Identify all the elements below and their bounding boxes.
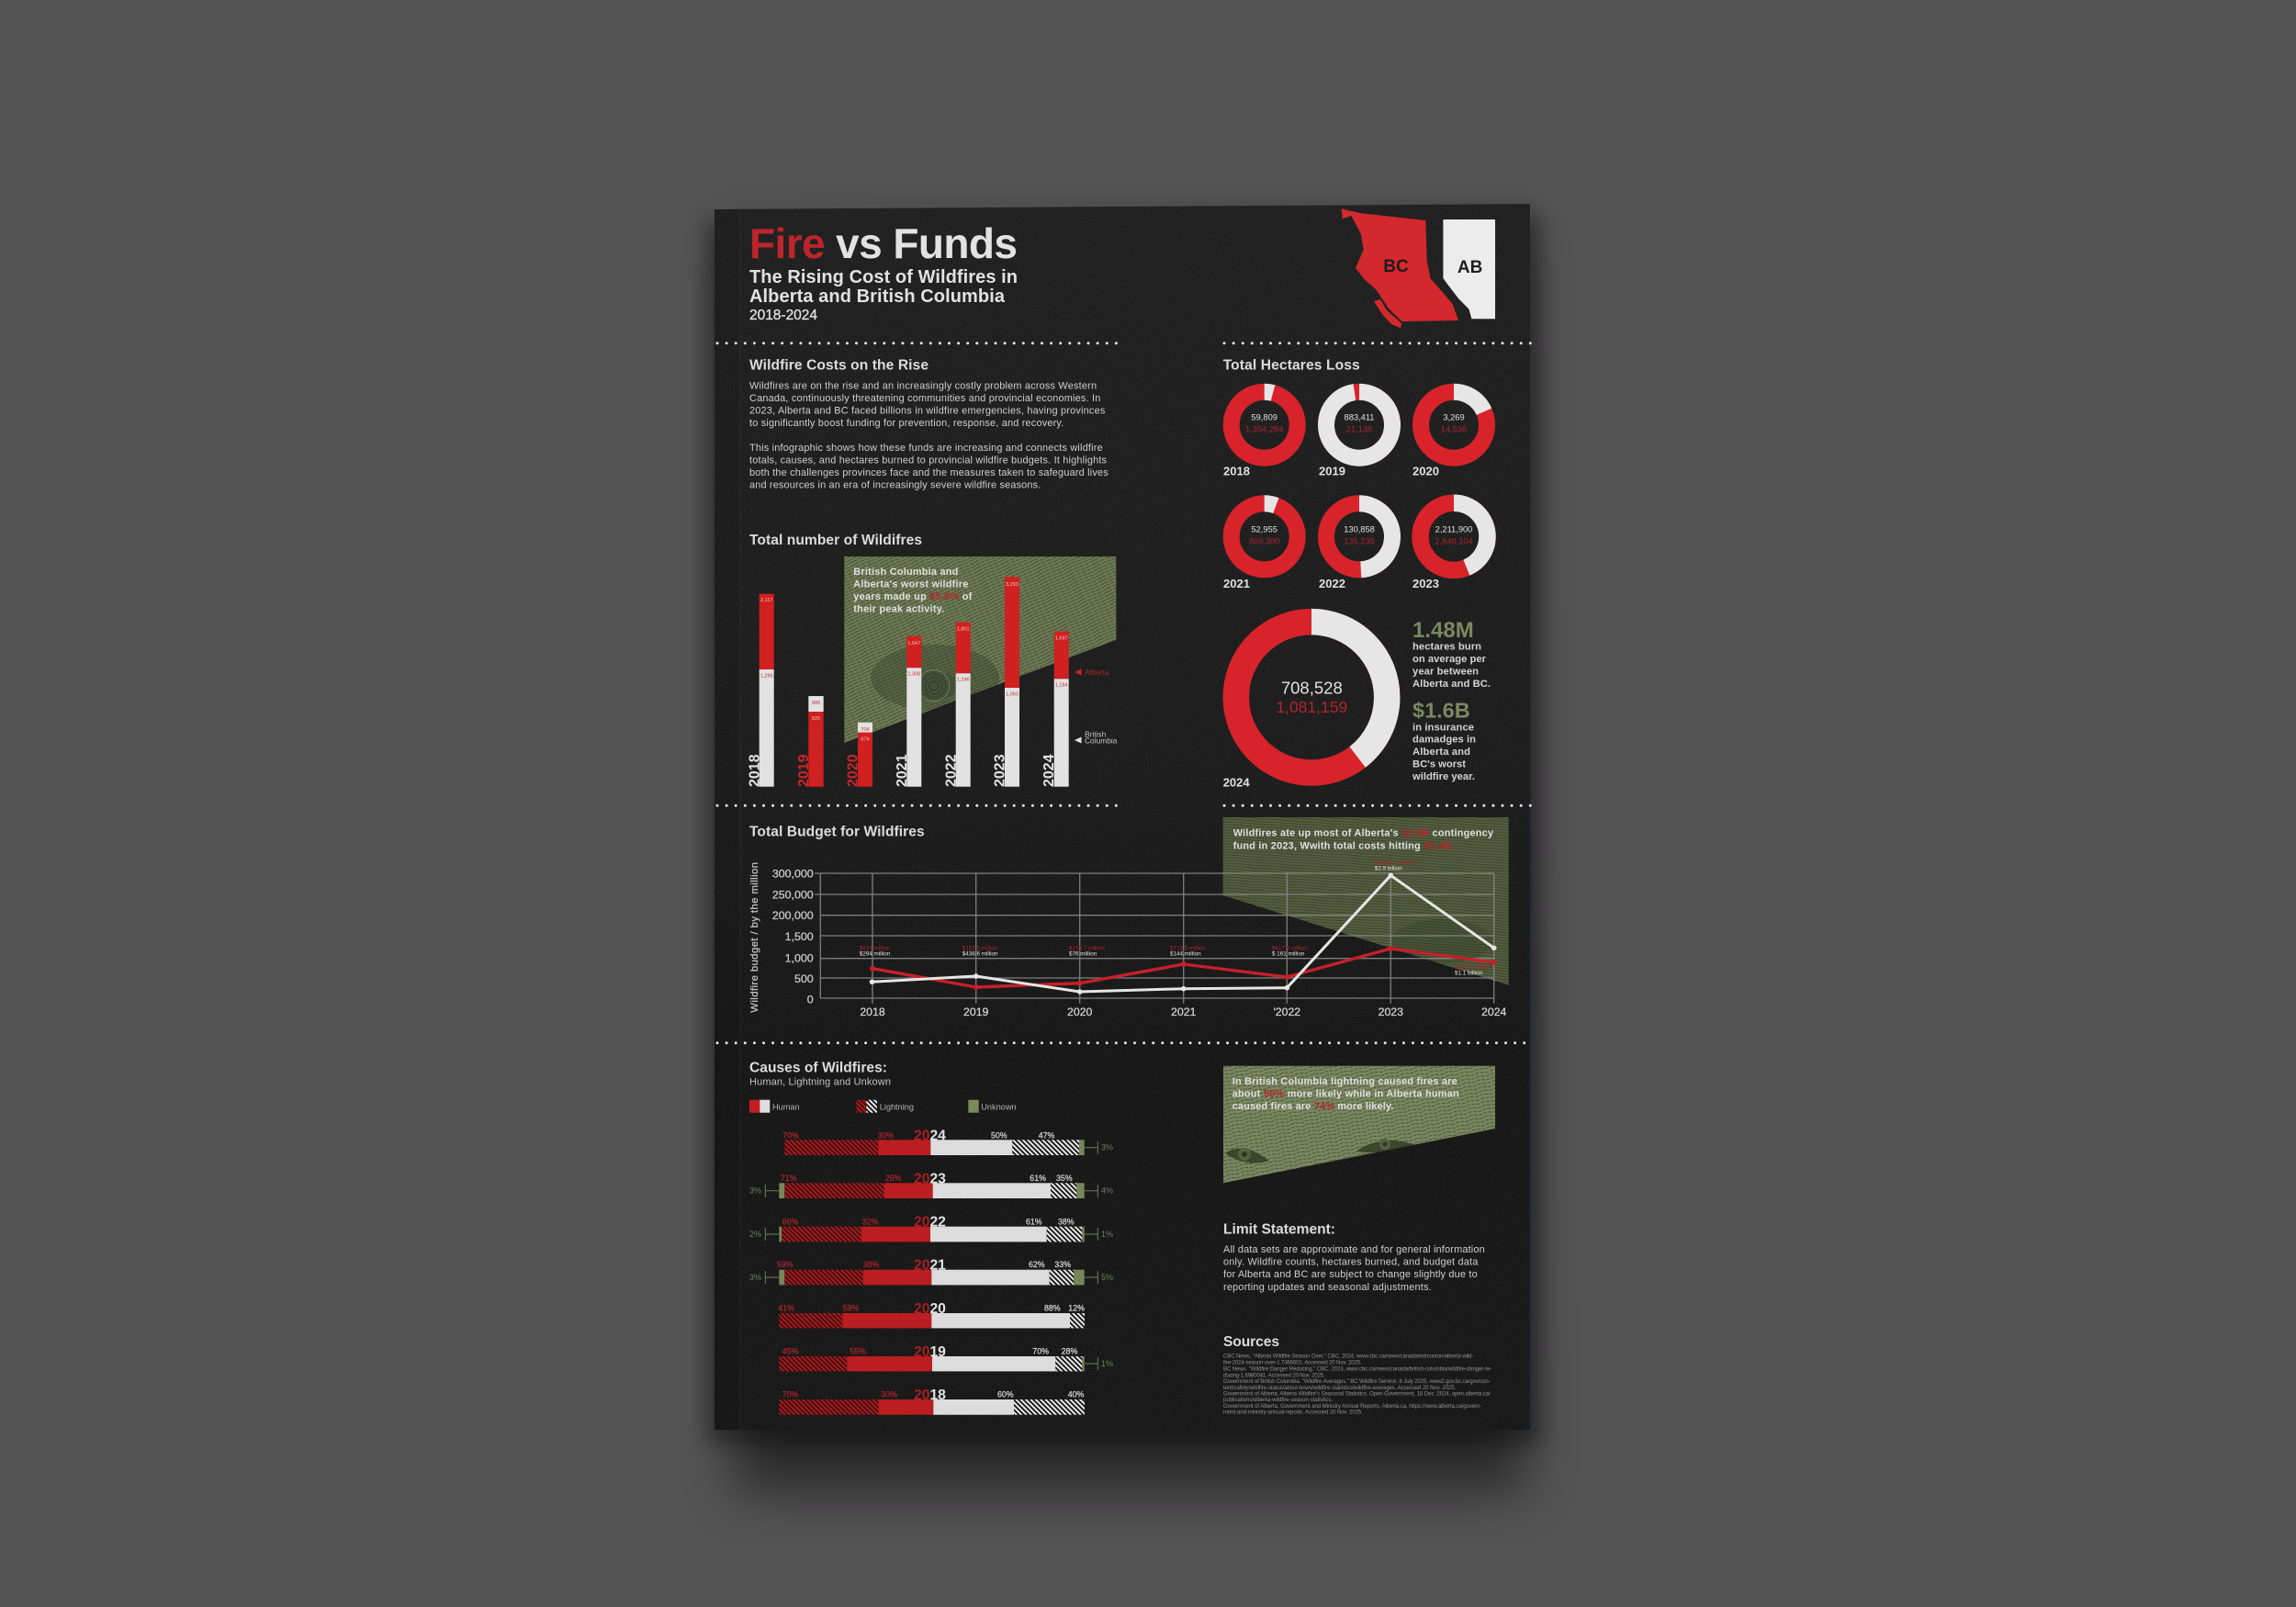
row 2018: 60% bbox=[997, 1389, 1014, 1399]
heading: total number of wildfires: Total number of Wildifres bbox=[749, 533, 922, 548]
row 2022: 1% bbox=[1101, 1230, 1113, 1239]
text block: wildfire costs on the rise: both the challenges provinces face and the measures taken to safeguard lives bbox=[749, 467, 1109, 478]
donut 2023: 2,840,104 bbox=[1435, 537, 1473, 546]
donut 2022 bbox=[1319, 503, 1392, 590]
bar 2023: 3,293 bbox=[1006, 582, 1019, 588]
y axis title: Wildfire budget / by the million bbox=[749, 862, 760, 1013]
green banknote panel: worst wildfire years: British Columbia and bbox=[853, 567, 958, 578]
donut 2019: 21,138 bbox=[1346, 425, 1372, 434]
row 2019 bbox=[779, 1344, 1113, 1371]
bar 2024: 1,184 bbox=[1055, 682, 1068, 688]
donut 2020 bbox=[1412, 392, 1487, 478]
donut 2022: 130,858 bbox=[1344, 524, 1375, 534]
sources: publications/alberta-wildfire-season-statistics. bbox=[1223, 1397, 1333, 1403]
poster sheet bbox=[715, 204, 1531, 1430]
row 2021: 33% bbox=[1054, 1260, 1071, 1269]
text block: wildfire costs on the rise: to significantly boost funding for prevention, response, and recovery. bbox=[749, 418, 1064, 429]
bar 2021: 2021 bbox=[895, 754, 910, 787]
sources: fire-2024-season-over-1.7366601. Accessed 20 Nov. 2025. bbox=[1223, 1360, 1362, 1366]
x axis labels: 2021 bbox=[1171, 1006, 1197, 1018]
white series: British Columbia bbox=[870, 872, 1496, 995]
data labels: $417.9 million bbox=[1272, 945, 1308, 951]
stat: insurance damages: damadges in bbox=[1412, 735, 1476, 746]
donut 2018: 59,809 bbox=[1251, 413, 1277, 422]
donut 2024 bbox=[1223, 622, 1387, 790]
data labels: $182.5 million bbox=[962, 945, 998, 951]
bar 2020 bbox=[845, 723, 872, 787]
row 2018 bbox=[779, 1388, 1085, 1415]
sources: Government of British Columbia. "Wildfire Averages." BC Wildfire Service, 8 July 2025, www2.gov.bc.ca/gov/con- bbox=[1223, 1378, 1491, 1385]
heading: total budget: Total Budget for Wildfires bbox=[749, 825, 925, 840]
row 2019: 70% bbox=[1032, 1346, 1049, 1355]
row 2020: 2020 bbox=[914, 1301, 946, 1317]
data labels: $1.1 billion bbox=[1455, 971, 1483, 977]
x axis labels: 2023 bbox=[1379, 1006, 1403, 1018]
data labels bbox=[860, 860, 1491, 977]
legend: British Columbia: Columbia bbox=[1085, 736, 1118, 746]
donut 2021: 869,300 bbox=[1249, 537, 1280, 546]
donut 2024: 708,528 bbox=[1281, 678, 1343, 697]
bar 2024: 2024 bbox=[1041, 754, 1057, 787]
stat: hectares burned: hectares burn bbox=[1412, 641, 1481, 652]
limit statement: only. Wildfire counts, hectares burned, and budget data bbox=[1223, 1257, 1479, 1268]
row 2018: 40% bbox=[1068, 1389, 1084, 1399]
data labels: $1,082.5 million bbox=[1375, 860, 1415, 866]
donut 2018: 1,354,284 bbox=[1245, 425, 1283, 434]
bar 2019: 989 bbox=[812, 701, 820, 706]
x axis labels bbox=[860, 1006, 1507, 1018]
row 2020: 88% bbox=[1044, 1304, 1061, 1313]
data labels: $ 161 million bbox=[1272, 951, 1305, 958]
subtitle bbox=[749, 267, 1018, 323]
sources: Government of Alberta. Government and Ministry Annual Reports. Alberta.ca, https://www.alberta.ca/govern- bbox=[1223, 1403, 1481, 1410]
row 2022: 66% bbox=[782, 1217, 798, 1226]
bar 2020: 704 bbox=[861, 727, 870, 733]
row 2018: 30% bbox=[881, 1389, 897, 1399]
data labels: $438.6 million bbox=[962, 951, 998, 958]
green banknote panel: lightning vs human bbox=[1223, 1065, 1496, 1185]
green banknote panel: lightning vs human: In British Columbia lightning caused fires are bbox=[1232, 1076, 1458, 1087]
data labels: $294 million bbox=[860, 951, 891, 958]
row 2021: 2021 bbox=[914, 1258, 946, 1274]
sources: Sources bbox=[1223, 1334, 1279, 1350]
donut 2019: 883,411 bbox=[1345, 413, 1374, 422]
sources: Government of Alberta. Alberta Wildfire's Seasonal Statistics. Open Government, 18 Dec. 2024, open.alberta.ca/ bbox=[1223, 1390, 1491, 1397]
row 2023: 2023 bbox=[914, 1171, 946, 1186]
row 2019: 1% bbox=[1101, 1359, 1113, 1368]
limit statement: for Alberta and BC are subject to change slightly due to bbox=[1223, 1269, 1478, 1280]
bar 2024 bbox=[1041, 632, 1069, 787]
donut 2019: 2019 bbox=[1319, 465, 1345, 478]
text block: wildfire costs on the rise: totals, causes, and hectares burned to provincial wildfire budgets. It highlights bbox=[749, 455, 1108, 466]
map: BC and Alberta: BC bbox=[1383, 257, 1409, 276]
row 2024: 2024 bbox=[914, 1129, 946, 1144]
bar 2019 bbox=[796, 696, 824, 787]
row 2022: 38% bbox=[1058, 1217, 1075, 1226]
row 2023: 4% bbox=[1101, 1186, 1113, 1196]
legend: Alberta: Alberta bbox=[1085, 668, 1109, 677]
green banknote panel: worst wildfire years bbox=[844, 556, 1117, 744]
bar 2019: 2019 bbox=[796, 754, 812, 787]
row 2022: 61% bbox=[1026, 1217, 1042, 1226]
row 2023: 61% bbox=[1030, 1174, 1046, 1183]
row 2021: 59% bbox=[777, 1260, 793, 1269]
row 2020: 41% bbox=[778, 1304, 794, 1313]
row 2020: 59% bbox=[843, 1304, 859, 1313]
green banknote panel: lightning vs human: caused fires are 74% more likely. bbox=[1232, 1101, 1393, 1112]
row 2021: 62% bbox=[1029, 1260, 1045, 1269]
row 2023 bbox=[749, 1171, 1113, 1198]
row 2024: 47% bbox=[1039, 1130, 1054, 1140]
bar 2018: 2,117 bbox=[760, 598, 772, 603]
green banknote panel: worst wildfire years: years made up 85.8% of bbox=[853, 591, 973, 602]
data labels: $76 million bbox=[1069, 951, 1097, 958]
line chart: wildfire budgets bbox=[749, 860, 1507, 1018]
sources: ment-and-ministry-annual-reports. Accessed 20 Nov. 2025. bbox=[1223, 1409, 1363, 1415]
bar 2020: 679 bbox=[861, 736, 870, 742]
row 2021: 5% bbox=[1101, 1273, 1113, 1282]
text block: wildfire costs on the rise: Canada, continuously threatening communities and provincial economies. In bbox=[749, 393, 1100, 404]
data labels: $2.9 billion bbox=[1375, 866, 1402, 872]
donut 2022: 135,235 bbox=[1344, 537, 1375, 546]
stat: hectares burned: year between bbox=[1412, 666, 1479, 677]
red series: Alberta bbox=[870, 946, 1497, 990]
y axis labels: 300,000 bbox=[772, 867, 814, 880]
y axis labels: 1,000 bbox=[785, 951, 814, 964]
data labels: $718.5 million bbox=[1170, 945, 1206, 951]
green banknote panel: contingency fund bbox=[1222, 817, 1509, 986]
row 2020 bbox=[778, 1301, 1085, 1328]
bar 2021: 1,647 bbox=[907, 641, 920, 646]
row 2022: 32% bbox=[862, 1217, 878, 1226]
y axis labels: 500 bbox=[794, 972, 814, 985]
x axis labels: '2022 bbox=[1273, 1006, 1300, 1018]
donut 2023 bbox=[1412, 503, 1488, 590]
donut 2020: 14,536 bbox=[1441, 425, 1467, 434]
bar 2020: 2020 bbox=[845, 754, 861, 787]
stat: insurance damages: wildfire year. bbox=[1412, 771, 1475, 782]
x axis labels: 2018 bbox=[860, 1006, 885, 1018]
green banknote panel: contingency fund: fund in 2023, Wwith total costs hitting $3.4B. bbox=[1233, 840, 1454, 851]
y axis labels: 0 bbox=[807, 994, 814, 1006]
causes legend: Lightning bbox=[880, 1102, 914, 1111]
bar 2022: 1,801 bbox=[957, 627, 970, 633]
stat: hectares burned bbox=[1412, 618, 1491, 690]
bar 2022 bbox=[944, 623, 971, 787]
donut 2020: 2020 bbox=[1412, 465, 1439, 478]
stat: hectares burned: on average per bbox=[1412, 654, 1487, 665]
data labels: $615 million bbox=[860, 945, 891, 951]
donut 2019 bbox=[1319, 392, 1392, 478]
row 2022: 2022 bbox=[914, 1215, 946, 1231]
causes legend: Human bbox=[772, 1102, 800, 1111]
x axis labels: 2020 bbox=[1067, 1006, 1093, 1018]
row 2021: 38% bbox=[863, 1260, 879, 1269]
row 2024: 50% bbox=[991, 1130, 1007, 1140]
row 2024: 3% bbox=[1101, 1143, 1113, 1152]
icon: banknote eye left bbox=[1225, 1148, 1269, 1163]
x axis labels: 2024 bbox=[1481, 1006, 1507, 1018]
donut 2021 bbox=[1223, 503, 1298, 590]
limit statement: Limit Statement: bbox=[1223, 1221, 1335, 1237]
causes legend bbox=[749, 1100, 1017, 1113]
map: BC and Alberta bbox=[1342, 208, 1495, 328]
data labels: $144 million bbox=[1170, 951, 1201, 958]
sources: tent/safety/wildfire-status/about-bcws/wildfire-statistics/wildfire-averages. Accessed 20 Nov. 2025. bbox=[1223, 1385, 1457, 1391]
green banknote panel: lightning vs human: about 50% more likely while in Alberta human bbox=[1232, 1089, 1459, 1100]
title: Fire vs Funds bbox=[749, 219, 1018, 267]
row 2020: 12% bbox=[1068, 1304, 1085, 1313]
y axis labels: 200,000 bbox=[772, 909, 814, 922]
row 2021 bbox=[749, 1258, 1113, 1285]
bar 2022: 1,246 bbox=[957, 678, 970, 683]
row 2023: 26% bbox=[885, 1174, 901, 1183]
bar 2019: 825 bbox=[812, 716, 820, 722]
donut 2020: 3,269 bbox=[1443, 413, 1465, 422]
sources: BC News. "Wildfire Danger Reducing." CBC, 2023, www.cbc.ca/news/canada/british-columbia/wildfire-danger-re- bbox=[1223, 1365, 1491, 1372]
limit statement: reporting updates and seasonal adjustments. bbox=[1223, 1282, 1432, 1293]
row 2018: 2018 bbox=[914, 1388, 946, 1403]
map: BC and Alberta: AB bbox=[1458, 258, 1482, 277]
heading: causes of wildfires: Human, Lightning and Unkown bbox=[749, 1076, 891, 1087]
donut 2021: 2021 bbox=[1223, 577, 1250, 590]
bar 2023 bbox=[992, 577, 1019, 787]
legend: British Columbia bbox=[1075, 729, 1118, 746]
causes chart bbox=[749, 1129, 1113, 1415]
row 2022 bbox=[749, 1215, 1113, 1242]
row 2023: 71% bbox=[781, 1174, 797, 1183]
donut 2024: 2024 bbox=[1223, 776, 1250, 790]
row 2022: 2% bbox=[749, 1230, 761, 1239]
row 2024: 30% bbox=[878, 1130, 894, 1140]
row 2024 bbox=[782, 1129, 1113, 1155]
sources bbox=[1223, 1334, 1491, 1415]
data labels: $780.1 million bbox=[1455, 964, 1491, 971]
row 2019: 28% bbox=[1062, 1346, 1077, 1355]
donut 2021: 52,955 bbox=[1251, 524, 1277, 534]
row 2021: 3% bbox=[749, 1273, 761, 1282]
donut 2024: 1,081,159 bbox=[1276, 698, 1347, 716]
row 2019: 45% bbox=[782, 1346, 798, 1355]
row 2018: 70% bbox=[782, 1389, 798, 1399]
poster drop shadow bbox=[707, 213, 1541, 1492]
text block: wildfire costs on the rise: This infographic shows how these funds are increasing and connects wildfire bbox=[749, 443, 1103, 454]
green banknote panel: contingency fund: Wildfires ate up most of Alberta's $1.5B contingency bbox=[1233, 828, 1493, 839]
donut 2023: 2,211,900 bbox=[1435, 524, 1472, 534]
donut 2018: 2018 bbox=[1223, 465, 1250, 478]
bar 2023: 1,065 bbox=[1006, 691, 1019, 697]
subtitle: The Rising Cost of Wildfires in bbox=[749, 267, 1018, 287]
y axis labels: 1,500 bbox=[785, 930, 814, 943]
row 2023: 35% bbox=[1056, 1174, 1073, 1183]
green banknote panel: worst wildfire years: their peak activity. bbox=[853, 604, 944, 615]
heading: causes of wildfires: Causes of Wildfires: bbox=[749, 1060, 887, 1075]
stat: insurance damages: in insurance bbox=[1412, 722, 1474, 733]
donut 2018 bbox=[1223, 392, 1298, 478]
legend: British Columbia: British bbox=[1085, 729, 1107, 738]
donut 2022: 2022 bbox=[1319, 577, 1345, 590]
stat: insurance damages: BC's worst bbox=[1412, 759, 1466, 770]
text block: wildfire costs on the rise: and resources in an era of increasingly severe wildfire seasons. bbox=[749, 479, 1041, 490]
stat: insurance damages: $1.6B bbox=[1412, 699, 1470, 723]
limit statement bbox=[1223, 1221, 1485, 1293]
stacked bar chart: number of wildfires bbox=[748, 577, 1118, 787]
row 2019: 2019 bbox=[914, 1344, 946, 1360]
text block: wildfire costs on the rise: 2023, Alberta and BC faced billions in wildfire emergencies, having provinces bbox=[749, 406, 1106, 417]
donut 2023: 2023 bbox=[1412, 577, 1439, 590]
x axis labels: 2019 bbox=[963, 1006, 989, 1018]
bar 2018: 2018 bbox=[748, 754, 762, 787]
bar 2023: 2023 bbox=[992, 754, 1008, 787]
bar 2018: 1,286 bbox=[760, 674, 773, 680]
subtitle: Alberta and British Columbia bbox=[749, 287, 1006, 307]
icon: banknote eye right bbox=[1356, 1139, 1416, 1152]
heading: causes of wildfires bbox=[749, 1060, 891, 1087]
stat: hectares burned: 1.48M bbox=[1412, 618, 1474, 643]
y axis labels bbox=[772, 867, 814, 1006]
causes legend: Unknown bbox=[981, 1102, 1017, 1111]
row 2023: 3% bbox=[749, 1186, 761, 1196]
heading: total hectares loss: Total Hectares Loss bbox=[1223, 358, 1360, 374]
sources: CBC News. "Alberta Wildfire Season Over." CBC, 2024, www.cbc.ca/news/canada/edmonton/alberta-wild- bbox=[1223, 1354, 1473, 1360]
stat: insurance damages: Alberta and bbox=[1412, 747, 1470, 758]
y axis labels: 250,000 bbox=[772, 889, 814, 902]
bar 2022: 2022 bbox=[944, 754, 959, 787]
limit statement: All data sets are approximate and for general information bbox=[1223, 1244, 1485, 1255]
row 2024: 70% bbox=[782, 1130, 799, 1140]
subtitle: 2018-2024 bbox=[749, 308, 817, 323]
data labels: $199.7 million bbox=[1069, 945, 1105, 951]
stat: insurance damages bbox=[1412, 699, 1476, 782]
bar 2018 bbox=[748, 594, 774, 787]
bar 2021 bbox=[895, 636, 921, 787]
text block: wildfire costs on the rise: Wildfires are on the rise and an increasingly costly problem across Western bbox=[749, 380, 1097, 391]
green banknote panel: worst wildfire years: Alberta's worst wildfire bbox=[853, 579, 968, 590]
bar 2024: 1,697 bbox=[1055, 636, 1068, 642]
bar 2021: 1,308 bbox=[907, 672, 920, 678]
row 2019: 55% bbox=[850, 1346, 866, 1355]
sources: ducing-1.6980041. Accessed 20 Nov. 2025. bbox=[1223, 1372, 1325, 1378]
stat: hectares burned: Alberta and BC. bbox=[1412, 679, 1491, 690]
text block: wildfire costs on the rise bbox=[749, 358, 1109, 490]
text block: wildfire costs on the rise: Wildfire Costs on the Rise bbox=[749, 358, 929, 374]
